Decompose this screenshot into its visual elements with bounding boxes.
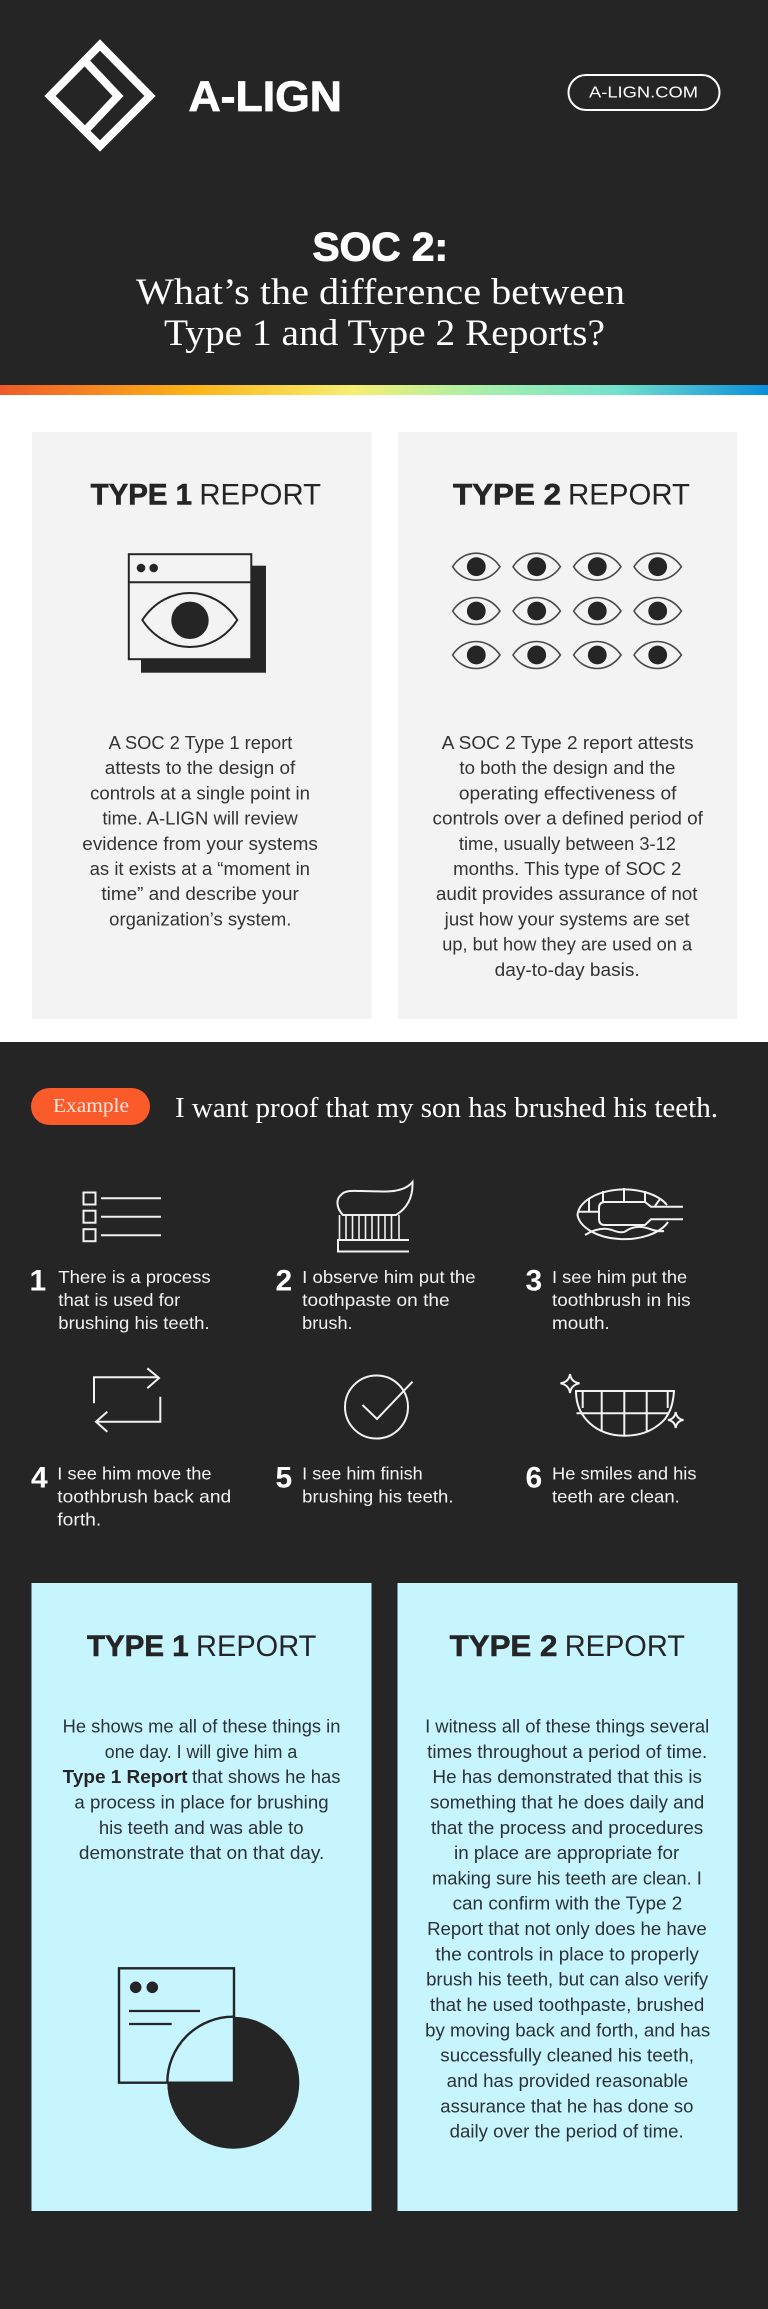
step 5: 5 <box>276 1461 292 1494</box>
icon: window and pie chart <box>119 1968 299 2149</box>
type 2 example text: I witness all of these things several <box>425 1716 709 1736</box>
step 1: that is used for <box>58 1290 180 1310</box>
type 2 example text: the controls in place to properly <box>435 1944 699 1964</box>
panel: type 1 example <box>32 1583 372 2211</box>
title: Type 1 and Type 2 Reports? <box>164 313 605 354</box>
step 5 <box>276 1376 454 1506</box>
icon: back and forth arrows <box>94 1368 160 1432</box>
type 2 example text: daily over the period of time. <box>450 2122 684 2142</box>
type 2 example text: that the process and procedures <box>431 1818 703 1838</box>
icon: grid of twelve eyes <box>453 553 681 668</box>
step 4: 4 <box>31 1461 48 1494</box>
step 3: I see him put the <box>552 1267 687 1287</box>
heading: type 1 report: TYPE 1 <box>87 1630 189 1663</box>
heading: type 1 report <box>87 1630 316 1663</box>
type 1 description: evidence from your systems <box>82 834 318 854</box>
type 2 example text: something that he does daily and <box>430 1792 704 1812</box>
type 2 description: to both the design and the <box>459 758 675 778</box>
type 2 description: A SOC 2 Type 2 report attests <box>442 733 694 753</box>
example badge <box>31 1088 150 1125</box>
website pill: A-LIGN.COM <box>589 85 698 102</box>
step 2 <box>276 1182 476 1333</box>
white comparison section background <box>0 395 768 1042</box>
icon: A-LIGN logo diamond <box>50 45 150 146</box>
type 2 description: months. This type of SOC 2 <box>453 859 681 879</box>
icon: toothbrush in mouth <box>578 1188 683 1239</box>
panel: type 2 definition <box>398 432 738 1019</box>
title <box>136 226 625 354</box>
type 2 example text: that he used toothpaste, brushed <box>430 1995 704 2015</box>
step 4: forth. <box>57 1510 101 1530</box>
step 2: 2 <box>276 1265 292 1298</box>
heading: type 1 report <box>91 479 321 512</box>
step 1: There is a process <box>58 1267 211 1287</box>
heading: type 1 report: REPORT <box>199 479 321 512</box>
icon: browser window with eye <box>129 554 266 673</box>
type 1 description: time” and describe your <box>101 884 299 904</box>
type 2 example text: in place are appropriate for <box>454 1843 679 1863</box>
type 2 example text: and has provided reasonable <box>447 2071 688 2091</box>
type 1 example text: his teeth and was able to <box>99 1818 304 1838</box>
heading: type 2 report <box>453 479 690 512</box>
website pill <box>568 75 720 110</box>
type 1 example text: that shows he has <box>192 1767 340 1787</box>
type 2 example text: by moving back and forth, and has <box>425 2020 710 2040</box>
step 1 <box>30 1192 211 1333</box>
type 2 example text: Report that not only does he have <box>427 1919 707 1939</box>
type 2 description: just how your systems are set <box>444 909 690 929</box>
heading: type 1 report: TYPE 1 <box>91 479 192 512</box>
type 2 description: up, but how they are used on a <box>442 935 693 955</box>
type 2 description: operating effectiveness of <box>459 783 677 803</box>
type 2 description: controls over a defined period of <box>432 809 704 829</box>
example statement: I want proof that my son has brushed his teeth. <box>175 1093 718 1124</box>
title: What’s the difference between <box>136 272 625 313</box>
step 2: I observe him put the <box>302 1267 476 1287</box>
type 1 description: time. A-LIGN will review <box>102 809 299 829</box>
type 1 example text: demonstrate that on that day. <box>79 1843 324 1863</box>
heading: type 2 report: TYPE 2 <box>453 479 561 512</box>
type 1 example text: Type 1 Report <box>63 1767 188 1787</box>
step 4: toothbrush back and <box>57 1486 231 1506</box>
header <box>50 45 720 354</box>
step 2: toothpaste on the <box>302 1290 450 1310</box>
type 2 description: time, usually between 3-12 <box>459 834 676 854</box>
type 2 description: day-to-day basis. <box>495 960 640 980</box>
step 3: toothbrush in his <box>552 1290 691 1310</box>
step 6: 6 <box>526 1461 542 1494</box>
step 5: I see him finish <box>302 1464 423 1484</box>
icon: clean smile with sparkles <box>560 1374 684 1436</box>
step 5: brushing his teeth. <box>302 1486 454 1506</box>
step 3 <box>526 1188 691 1333</box>
type 2 description <box>432 733 704 980</box>
icon: checklist <box>84 1192 161 1241</box>
step 3: mouth. <box>552 1313 610 1333</box>
heading: type 2 report: REPORT <box>568 479 690 512</box>
type 2 example text: assurance that he has done so <box>440 2096 694 2116</box>
heading: type 2 report: TYPE 2 <box>450 1630 557 1663</box>
type 2 example text: times throughout a period of time. <box>427 1742 707 1762</box>
type 2 example text: making sure his teeth are clean. I <box>432 1868 702 1888</box>
type 2 example text: can confirm with the Type 2 <box>453 1894 682 1914</box>
type 1 description <box>82 733 318 929</box>
step 4: I see him move the <box>57 1464 212 1484</box>
type 1 example text <box>63 1716 340 1863</box>
step 1: brushing his teeth. <box>58 1313 210 1333</box>
type 2 example text: He has demonstrated that this is <box>432 1767 702 1787</box>
type 1 description: attests to the design of <box>105 758 296 778</box>
step 2: brush. <box>302 1313 353 1333</box>
step 6: teeth are clean. <box>552 1486 680 1506</box>
type 2 example text: brush his teeth, but can also verify <box>426 1970 708 1990</box>
heading: type 2 report <box>450 1630 685 1663</box>
step 6 <box>526 1374 697 1506</box>
step 4 <box>31 1368 231 1530</box>
type 1 description: A SOC 2 Type 1 report <box>109 733 292 753</box>
type 1 example text: a process in place for brushing <box>74 1792 329 1812</box>
type 1 example text: He shows me all of these things in <box>63 1716 340 1736</box>
panel: type 1 definition <box>32 432 372 1019</box>
logo wordmark: A-LIGN <box>188 73 342 121</box>
panel: type 2 example <box>398 1583 738 2211</box>
step 1: 1 <box>30 1265 46 1298</box>
type 1 example text: one day. I will give him a <box>105 1742 298 1762</box>
type 2 example text: successfully cleaned his teeth, <box>440 2046 694 2066</box>
type 1 description: as it exists at a “moment in <box>90 859 310 879</box>
heading: type 1 report: REPORT <box>196 1630 316 1663</box>
rainbow gradient bar <box>0 385 768 395</box>
example badge: Example <box>53 1095 129 1117</box>
type 2 description: audit provides assurance of not <box>436 884 698 904</box>
icon: check mark in circle <box>345 1376 412 1438</box>
heading: type 2 report: REPORT <box>565 1630 685 1663</box>
type 1 description: controls at a single point in <box>90 783 310 803</box>
title: SOC 2: <box>312 226 448 270</box>
type 2 example text <box>425 1716 710 2142</box>
step 3: 3 <box>526 1265 542 1298</box>
type 1 description: organization’s system. <box>109 909 291 929</box>
step 6: He smiles and his <box>552 1464 697 1484</box>
icon: toothbrush with toothpaste <box>337 1182 413 1252</box>
